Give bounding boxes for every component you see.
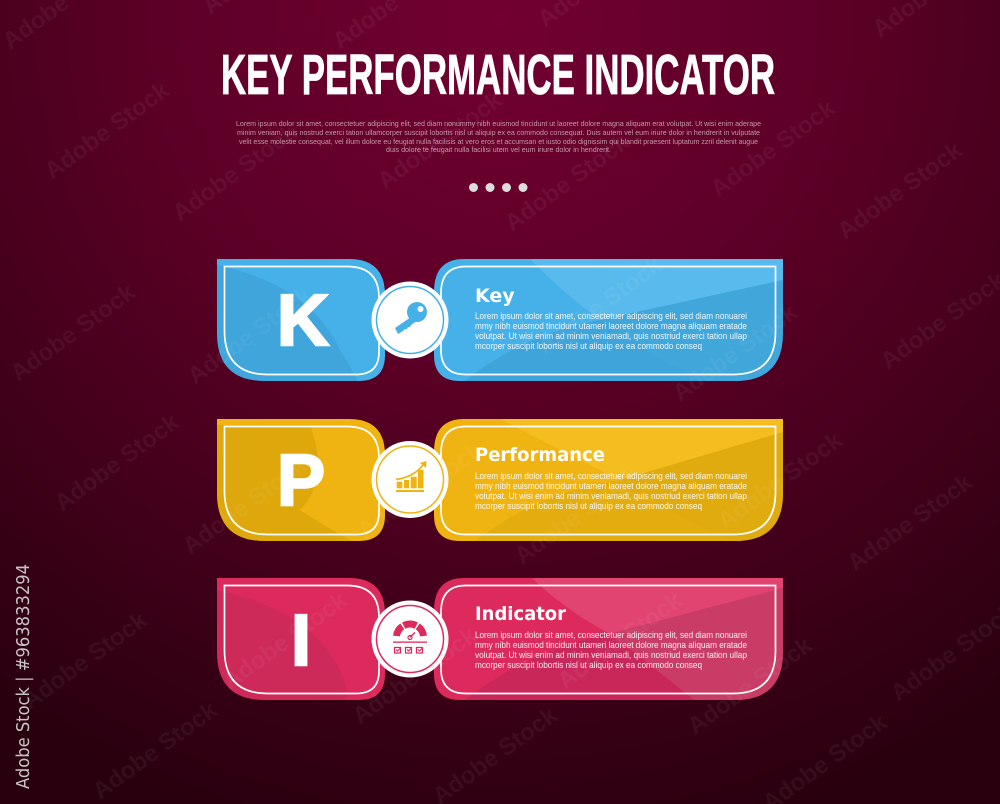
dots <box>469 183 528 192</box>
panel: I letter block <box>217 578 385 705</box>
watermarks: Adobe Stock <box>553 586 688 695</box>
text block: Key <box>475 311 747 351</box>
watermarks: Adobe Stock <box>843 468 978 577</box>
panel: Indicator description <box>434 578 783 705</box>
watermarks: Adobe Stock <box>88 696 223 804</box>
text block: Indicator <box>475 630 747 670</box>
panel: P letter block <box>217 419 385 545</box>
heading: Performance: Performance <box>475 444 605 466</box>
heading: Indicator: Indicator <box>475 603 567 625</box>
watermarks: Adobe Stock <box>510 461 645 570</box>
text block: Performance: volutpat. Ut wisi enim ad minim veniamadi, quis nostriud exerci tation ullap <box>475 491 747 501</box>
text block: Performance: Lorem ipsum dolor sit amet, consectetuer adipiscing elit, sed diam nonuarei <box>475 471 747 481</box>
letter I: I <box>291 601 311 681</box>
text block: intro <box>236 119 761 154</box>
icon: gauge badge <box>372 600 448 678</box>
text block: Key: mcorper suscipit lobortis nisl ut aliquip ex ea commodo conseq <box>475 341 702 351</box>
text block: Indicator: mmy nibh euismod tincidunt utameri laoreet dolore magna aliquam eratade <box>475 640 747 650</box>
watermarks: Adobe Stock <box>348 621 483 730</box>
icon: gauge with checkboxes <box>393 624 427 653</box>
text block: Key: mmy nibh euismod tincidunt utameri laoreet dolore magna aliquam eratade <box>475 321 747 331</box>
watermarks: Adobe Stock <box>706 94 841 203</box>
watermarks: Adobe Stock <box>183 281 318 390</box>
icon: key badge <box>372 282 448 358</box>
letter P: P <box>277 441 325 521</box>
watermarks: Adobe Stock <box>18 606 153 715</box>
icon: growth chart badge <box>372 441 448 518</box>
watermarks: Adobe Stock <box>713 426 848 535</box>
text block: intro: Lorem ipsum dolor sit amet, consectetuer adipiscing elit, sed diam nonummy nibh euismod tincidunt ut laoreet dolore magna aliquam erat volutpat. Ut wisi enim aderape <box>236 119 761 128</box>
watermarks: Adobe Stock <box>40 76 175 185</box>
watermarks: Adobe Stock <box>683 631 818 740</box>
panel: Key description <box>434 259 783 385</box>
icon: key <box>395 302 427 334</box>
text block: Performance <box>475 471 747 511</box>
icon: growth chart <box>396 461 426 492</box>
text block: intro: minim veniam, quis nostrud exerci tation ullamcorper suscipit lobortis nisl ut aliquip ex ea commodo consequat. Duis autem vel eum iriure dolor in hendrerit in vulputate <box>237 128 760 137</box>
panel: Performance description <box>434 419 783 545</box>
watermarks: Adobe Stock <box>833 136 968 245</box>
watermarks: Adobe Stock <box>168 118 303 227</box>
watermarks: Adobe Stock <box>178 451 313 560</box>
text block: intro: velit esse molestie consequat, vel illum dolore eu feugiat nulla facilisis at vero eros et accumsan et iusto odio dignissim qui blandit praesent luptatum zzril delenit augue <box>239 137 758 146</box>
watermarks: Adobe Stock <box>500 128 635 237</box>
heading: Key: Key <box>475 285 515 307</box>
watermarks: Adobe Stock <box>668 298 803 407</box>
watermarks: Adobe Stock <box>218 586 353 695</box>
text block: Indicator: Lorem ipsum dolor sit amet, consectetuer adipiscing elit, sed diam nonuarei <box>475 630 747 640</box>
watermarks: Adobe Stock <box>533 251 668 360</box>
watermark id text: Adobe Stock | #963833294 <box>14 564 34 789</box>
text block: Performance: mmy nibh euismod tincidunt utameri laoreet dolore magna aliquam eratade <box>475 481 747 491</box>
text block: intro: duis dolore te feugait nulla facilisi utem vel eum iriure dolor in hendrerit. <box>386 145 611 154</box>
letter K: K <box>277 281 329 361</box>
text block: Performance: mcorper suscipit lobortis nisl ut aliquip ex ea commodo conseq <box>475 501 702 511</box>
watermarks: Adobe Stock <box>6 278 141 387</box>
watermarks: Adobe Stock <box>373 86 508 195</box>
text block: Indicator: volutpat. Ut wisi enim ad minim veniamadi, quis nostriud exerci tation ullap <box>475 650 747 660</box>
panel: K letter block <box>217 259 385 385</box>
watermarks: Adobe Stock <box>353 436 488 545</box>
text block: Key: Lorem ipsum dolor sit amet, consectetuer adipiscing elit, sed diam nonuarei <box>475 311 747 321</box>
text block: Indicator: mcorper suscipit lobortis nisl ut aliquip ex ea commodo conseq <box>475 660 702 670</box>
watermarks: Adobe Stock <box>50 408 185 517</box>
text block: Key: volutpat. Ut wisi enim ad minim veniamadi, quis nostriud exerci tation ullap <box>475 331 747 341</box>
